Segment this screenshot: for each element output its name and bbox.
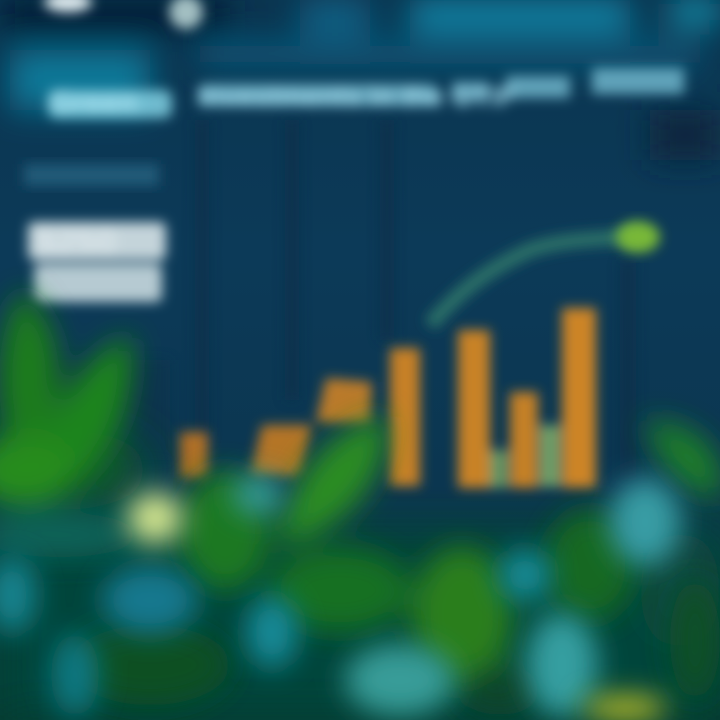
vertical dark grid bbox=[0, 120, 636, 480]
stat numbers: $250 bbox=[36, 221, 116, 262]
foliage: leaves bbox=[0, 290, 720, 715]
icons top bbox=[44, 0, 203, 29]
title: Investments in the GTIF bbox=[198, 81, 515, 112]
foliage: bright spots bbox=[127, 492, 667, 720]
top glow band bbox=[0, 0, 720, 160]
title bbox=[48, 68, 684, 119]
subtitle bbox=[24, 164, 159, 186]
bar chart bbox=[180, 308, 596, 488]
title: Green bbox=[50, 86, 137, 119]
foliage: teal highlights bbox=[0, 475, 681, 717]
foliage: dark base bbox=[0, 430, 720, 720]
trend line bbox=[430, 235, 640, 325]
trend marker bbox=[616, 221, 660, 253]
stat numbers bbox=[28, 221, 166, 302]
